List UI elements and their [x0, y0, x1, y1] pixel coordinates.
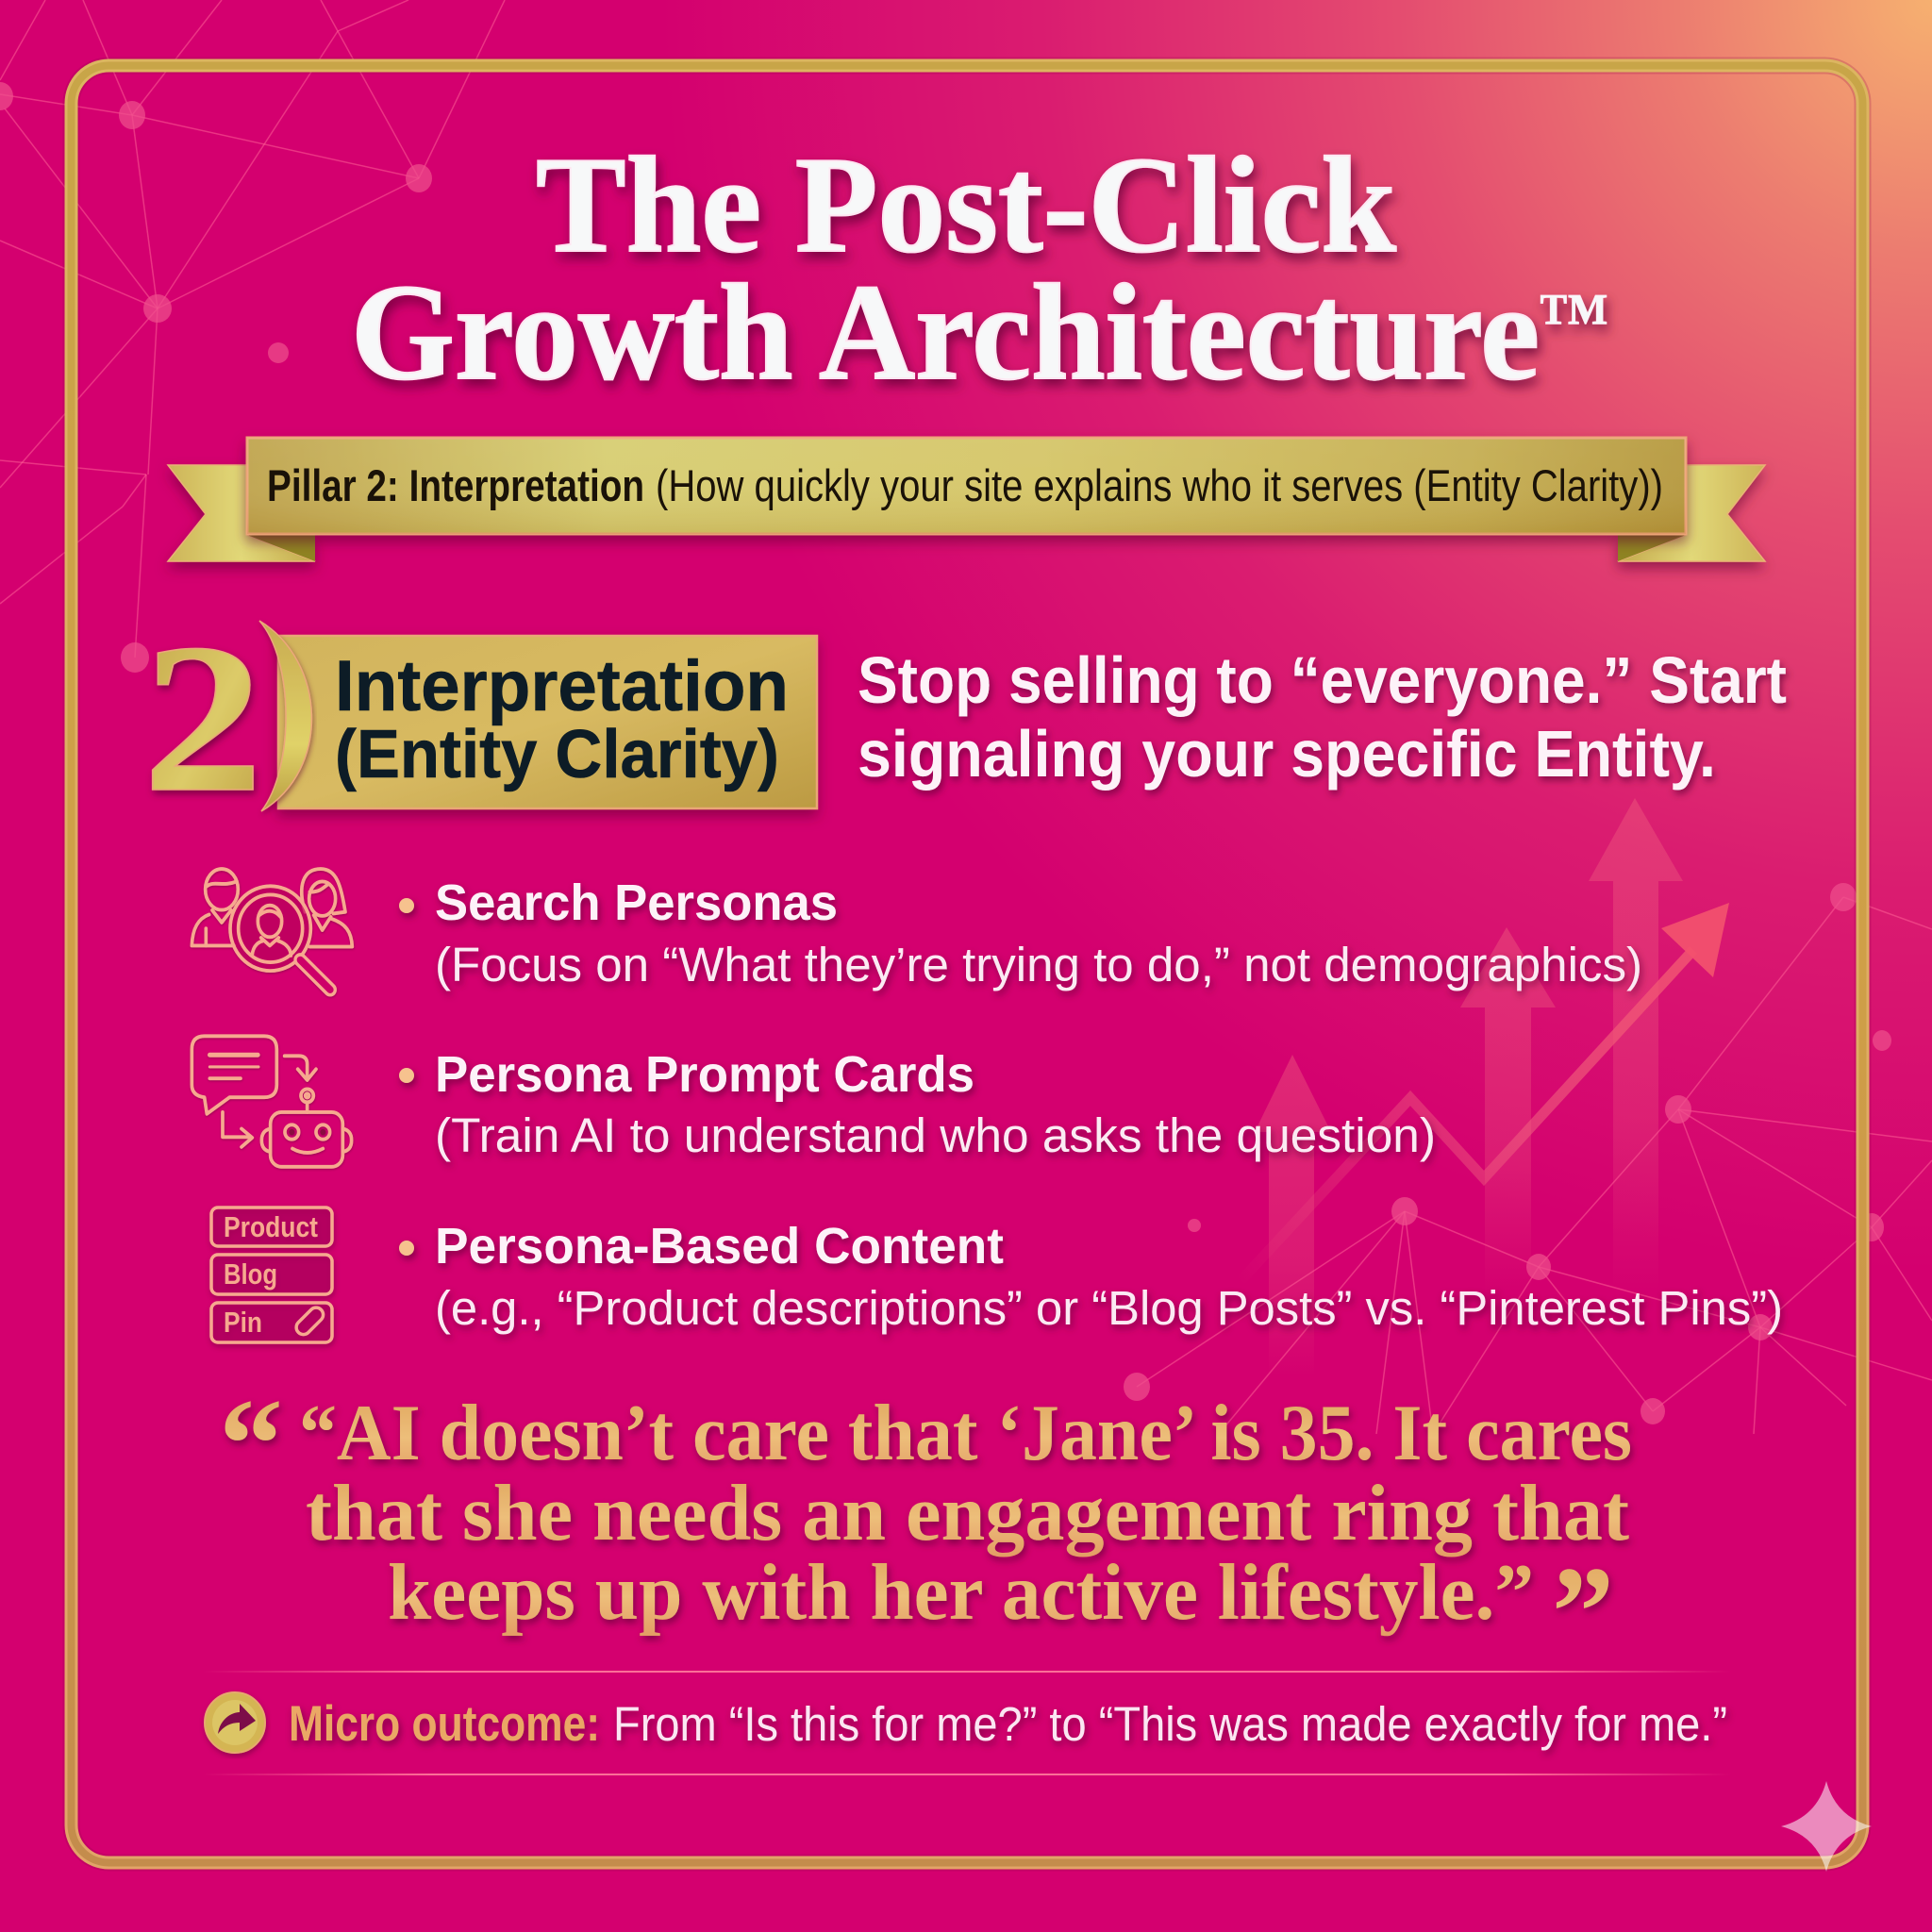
pull quote: keeps up with her active lifestyle.” [388, 1548, 1534, 1637]
micro outcome text: Micro outcome: [289, 1696, 600, 1752]
pull quote: “AI doesn’t care that ‘Jane’ is 35. It cares [299, 1389, 1632, 1477]
micro outcome text: From “Is this for me?” to “This was made exactly for me.” [613, 1697, 1727, 1751]
bullet: persona-based content [399, 1218, 1783, 1335]
background network: bottom right [1124, 883, 1932, 1434]
label text: (Entity Clarity) [335, 717, 779, 792]
micro outcome row [205, 1692, 1727, 1753]
title: Growth Architecture [351, 256, 1540, 408]
icon: sparkle watermark [1781, 1781, 1872, 1872]
icon: content type tags [211, 1208, 332, 1342]
bullet: persona prompt cards [399, 1046, 1436, 1162]
ribbon body [247, 438, 1686, 534]
bullet: persona-based content: (e.g., “Product descriptions” or “Blog Posts” vs. “Pinterest Pins”) [435, 1281, 1783, 1335]
bullet: persona-based content: Persona-Based Content [435, 1218, 1004, 1274]
icon: search personas [192, 869, 352, 990]
icon: persona prompt to AI [192, 1036, 352, 1167]
title [351, 128, 1609, 408]
subheading: Stop selling to “everyone.” Start [858, 643, 1787, 717]
bullet: search personas: Search Personas [435, 874, 838, 931]
icon: content type tags: Blog [224, 1257, 277, 1291]
section number badge [142, 600, 817, 836]
bullet: search personas: (Focus on “What they’re trying to do,” not demographics) [435, 938, 1642, 991]
ribbon text: Pillar 2: Interpretation [267, 460, 644, 510]
subheading [858, 643, 1787, 791]
closing quote mark: ” [1552, 1540, 1614, 1684]
title: The Post-Click [536, 128, 1396, 281]
label text [335, 646, 789, 792]
bullet: persona prompt cards: Persona Prompt Cards [435, 1046, 974, 1103]
icon: content type tags: Product [224, 1210, 318, 1243]
gold label plate [278, 636, 817, 808]
crescent [259, 621, 311, 811]
bullet: persona prompt cards: (Train AI to understand who asks the question) [435, 1108, 1436, 1162]
bullet: search personas [399, 874, 1642, 991]
large number 2: 2 [142, 600, 263, 836]
divider rules [203, 1671, 1731, 1775]
ribbon text [267, 460, 1663, 510]
icon: gold share arrow [205, 1692, 265, 1753]
subheading: signaling your specific Entity. [858, 717, 1716, 791]
icon: content type tags: Pin [224, 1306, 262, 1339]
title: ™ [1538, 277, 1609, 359]
ribbon tails [168, 465, 1765, 561]
label text: Interpretation [335, 646, 789, 726]
ribbon: pillar banner [168, 438, 1765, 561]
background network: top left [0, 0, 505, 673]
pull quote [219, 1372, 1632, 1684]
ribbon text: (How quickly your site explains who it serves (Entity Clarity)) [656, 460, 1663, 510]
bullet list [399, 874, 1783, 1335]
background growth arrows [1239, 798, 1729, 1377]
opening quote mark: “ [219, 1372, 283, 1516]
pull quote: that she needs an engagement ring that [306, 1469, 1629, 1557]
